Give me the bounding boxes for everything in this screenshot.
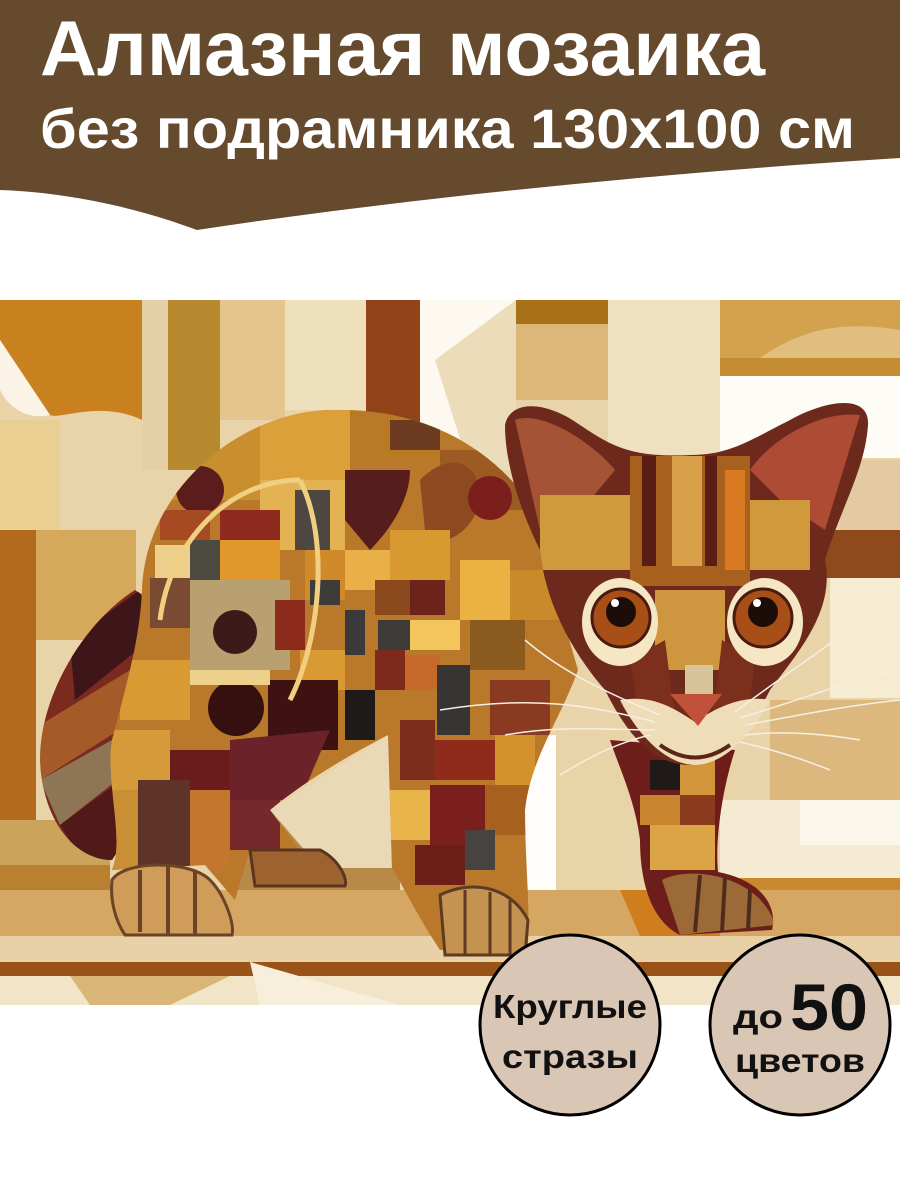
badge: up to 50 colours: цветов: [735, 1042, 865, 1079]
subtitle: без подрамника 130х100 см: [40, 97, 855, 160]
cat right leg: [610, 740, 774, 935]
title: Алмазная мозаика: [40, 4, 766, 92]
badge: up to 50 colours: 50: [790, 970, 868, 1044]
artwork: mosaic cat: [0, 300, 900, 1005]
cat head: [505, 403, 868, 765]
cat hind paw: [112, 850, 346, 935]
badge: round rhinestones: [480, 935, 660, 1115]
badge: up to 50 colours: до: [733, 998, 783, 1035]
cat whiskers: [440, 600, 900, 775]
cat tail: [40, 590, 142, 860]
cat front paw: [440, 887, 528, 955]
cat muzzle and nose: [620, 694, 770, 765]
badge: up to 50 colours: [710, 935, 890, 1115]
badge: round rhinestones: Круглые: [493, 988, 647, 1025]
cat body mosaic: [110, 410, 578, 950]
header banner: [0, 0, 900, 230]
badge: round rhinestones: стразы: [502, 1038, 638, 1075]
cat eyes: [582, 578, 803, 666]
artwork background: abstract blocks: [0, 300, 900, 1005]
